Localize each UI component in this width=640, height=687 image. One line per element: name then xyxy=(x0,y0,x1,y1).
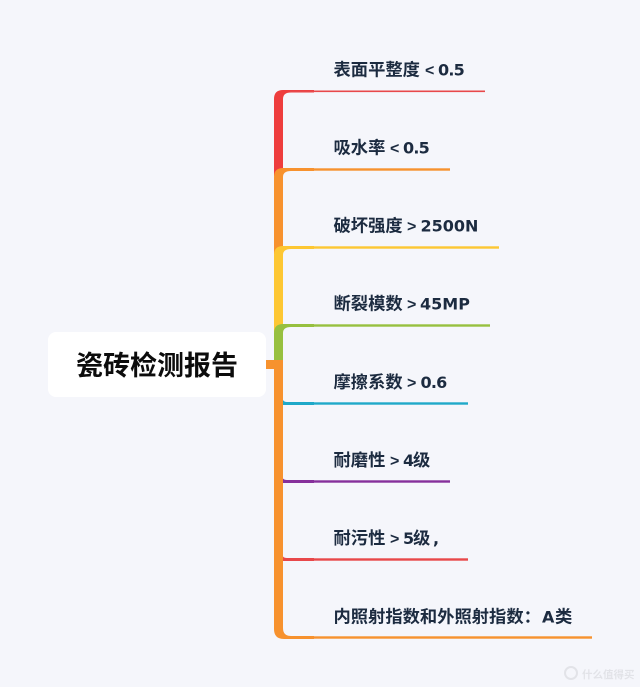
label: breaking strength: 破坏强度 xyxy=(334,216,403,236)
label: rupture modulus: 断裂模数 xyxy=(334,294,403,314)
branch: yellow breaking strength xyxy=(274,246,499,332)
label: friction coefficient: > xyxy=(407,375,416,392)
label: wear resistance: > xyxy=(390,453,399,470)
label: rupture modulus: 45MP xyxy=(420,294,470,314)
label: radiation index: 类 xyxy=(555,606,572,626)
branch: red stain resistance xyxy=(283,556,468,561)
label: stain resistance: , xyxy=(433,529,439,548)
branch: orange water absorption xyxy=(274,168,450,254)
label: stain resistance: > xyxy=(390,531,399,548)
label: radiation index: A xyxy=(542,608,555,626)
icon: watermark badge xyxy=(565,667,577,679)
label: rupture modulus: > xyxy=(407,296,416,314)
label: water absorption: 0.5 xyxy=(403,138,430,158)
label: radiation index: 内照射指数和外照射指数： xyxy=(334,606,541,626)
label: water absorption: 吸水率 xyxy=(334,138,385,158)
label: stain resistance: 5 xyxy=(403,529,414,548)
branch: orange trunk to bottom item xyxy=(266,360,592,639)
label: friction coefficient: 0.6 xyxy=(420,373,447,392)
watermark text: 什么值得买 xyxy=(582,668,635,681)
watermark xyxy=(565,667,635,681)
label: water absorption: < xyxy=(390,140,399,158)
label: breaking strength: > xyxy=(407,218,416,236)
label: stain resistance: 级 xyxy=(413,528,430,548)
branch: green rupture modulus xyxy=(274,324,490,362)
branch: purple wear resistance xyxy=(283,478,450,483)
label: friction coefficient: 摩擦系数 xyxy=(334,372,403,392)
branch: teal friction xyxy=(283,400,468,405)
label: wear resistance: 4 xyxy=(403,451,414,470)
label: stain resistance: 耐污性 xyxy=(334,528,385,548)
label: surface flatness: < xyxy=(425,62,434,80)
label: wear resistance: 级 xyxy=(413,450,430,470)
central topic card xyxy=(48,332,266,397)
title: 瓷砖检测报告 xyxy=(76,351,238,381)
label: surface flatness: 表面平整度 xyxy=(334,60,420,80)
branch: red surface flatness xyxy=(274,90,485,176)
label: wear resistance: 耐磨性 xyxy=(334,450,385,470)
label: breaking strength: 2500N xyxy=(420,216,478,236)
label: surface flatness: 0.5 xyxy=(438,60,465,80)
